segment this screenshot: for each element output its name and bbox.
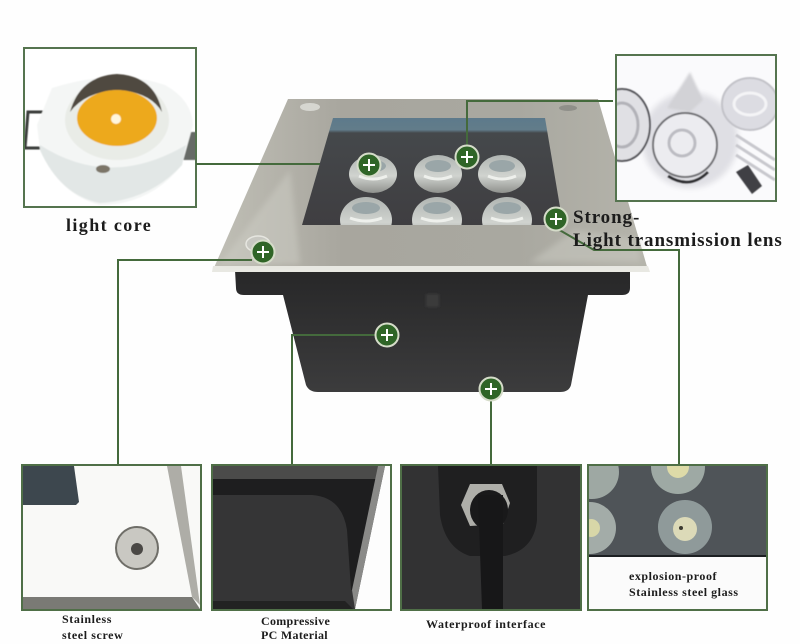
marker: LED lens [358, 154, 380, 176]
LED lens row 1 [349, 155, 526, 193]
marker: screw [252, 240, 274, 264]
line: PC material connector [292, 335, 376, 464]
LED lens row 2 [340, 197, 532, 225]
panel: waterproof interface [401, 465, 581, 610]
label: light core: light core [66, 215, 152, 235]
label: compressive PC material: Compressive [261, 614, 330, 628]
icon: hex screw [116, 527, 158, 569]
panel: explosion-proof glass [587, 464, 768, 611]
icon: LED lenses [589, 466, 712, 554]
panel: compressive PC material [212, 465, 391, 610]
line: glass connector [556, 228, 679, 464]
marker: body [376, 324, 398, 346]
label: compressive PC material: PC Material [261, 628, 328, 642]
line: lens connector [467, 101, 613, 147]
label: stainless steel screw: steel screw [62, 628, 123, 642]
label: strong light transmission lens: Strong- [573, 207, 640, 228]
icon: cable nut [461, 484, 510, 530]
line: screw connector [118, 260, 252, 464]
label: waterproof interface: Waterproof interface [426, 617, 546, 631]
marker: waterproof [480, 378, 502, 400]
line: waterproof connector [490, 400, 492, 464]
callout panel: light core [24, 48, 196, 207]
panel: stainless steel screw [22, 465, 201, 610]
fixture body [235, 270, 630, 392]
icon: glass lenses photo [617, 72, 775, 194]
glass window with LED lenses [302, 118, 560, 225]
label: explosion-proof stainless steel glass: Stainless steel glass [629, 585, 739, 599]
marker: lens [456, 146, 478, 168]
label: strong light transmission lens: Light transmission lens [573, 230, 783, 251]
stainless steel top plate [212, 99, 650, 272]
main product: LED underground light fixture [212, 99, 650, 392]
callout panel: lens [615, 54, 777, 202]
line: light core connector [196, 163, 320, 165]
icon: cable [478, 495, 503, 609]
label: stainless steel screw: Stainless [62, 612, 112, 626]
icon: LED core photo [25, 74, 196, 205]
marker: glass [544, 208, 568, 230]
label: explosion-proof stainless steel glass: explosion-proof [629, 569, 717, 583]
connector lines [118, 101, 679, 464]
